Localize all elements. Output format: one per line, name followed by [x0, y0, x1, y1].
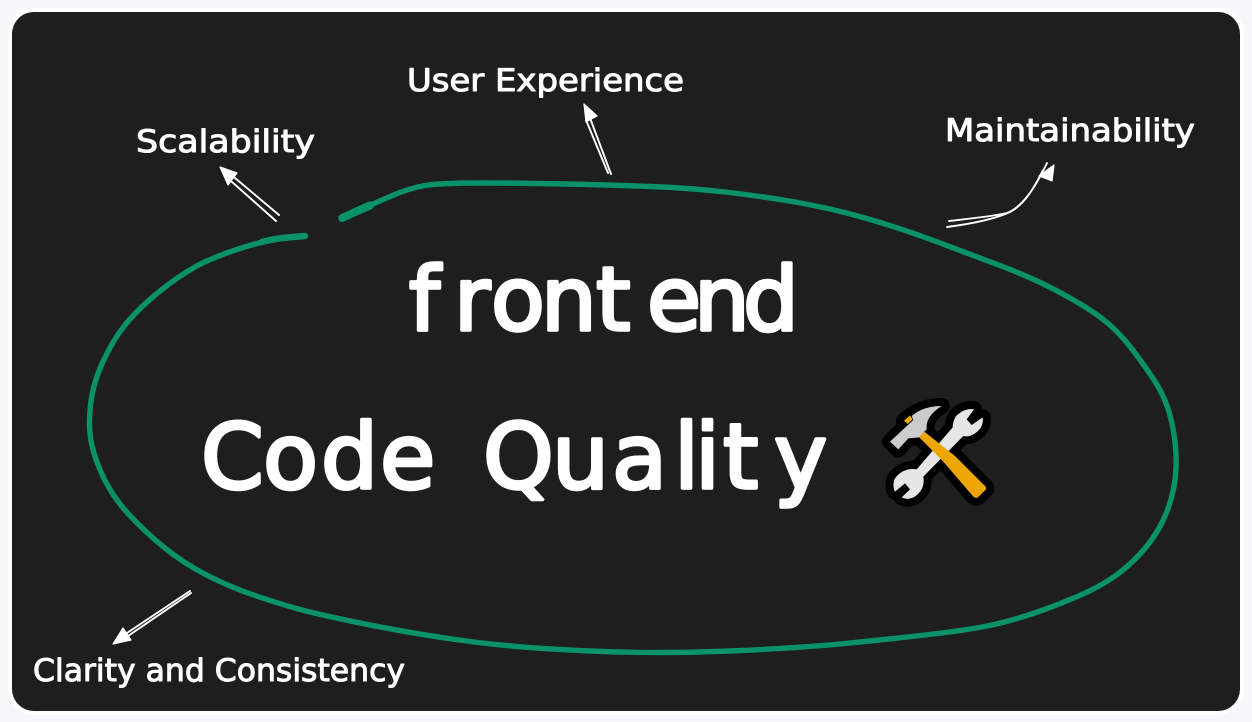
arrow: to Clarity and Consistency — [113, 591, 191, 644]
label: User Experience: User Experience — [407, 63, 684, 99]
thick end of green loop — [262, 236, 305, 242]
black outline of both tools — [890, 406, 986, 499]
arrow: to User Experience — [584, 104, 611, 174]
title line: frontend: frontend — [409, 248, 799, 351]
green hand-drawn loop — [89, 183, 1176, 652]
icon: hammer and wrench — [890, 406, 986, 499]
thick start of green loop — [342, 206, 370, 218]
label: Clarity and Consistency: Clarity and Consistency — [33, 653, 405, 689]
arrow: to Maintainability — [947, 163, 1054, 227]
wrench — [893, 409, 983, 499]
arrow: to Scalability — [220, 167, 279, 221]
title line: Code Quality: Code Quality — [201, 405, 827, 510]
hammer — [890, 406, 986, 498]
label: Scalability: Scalability — [136, 124, 315, 160]
label: Maintainability: Maintainability — [945, 113, 1195, 149]
